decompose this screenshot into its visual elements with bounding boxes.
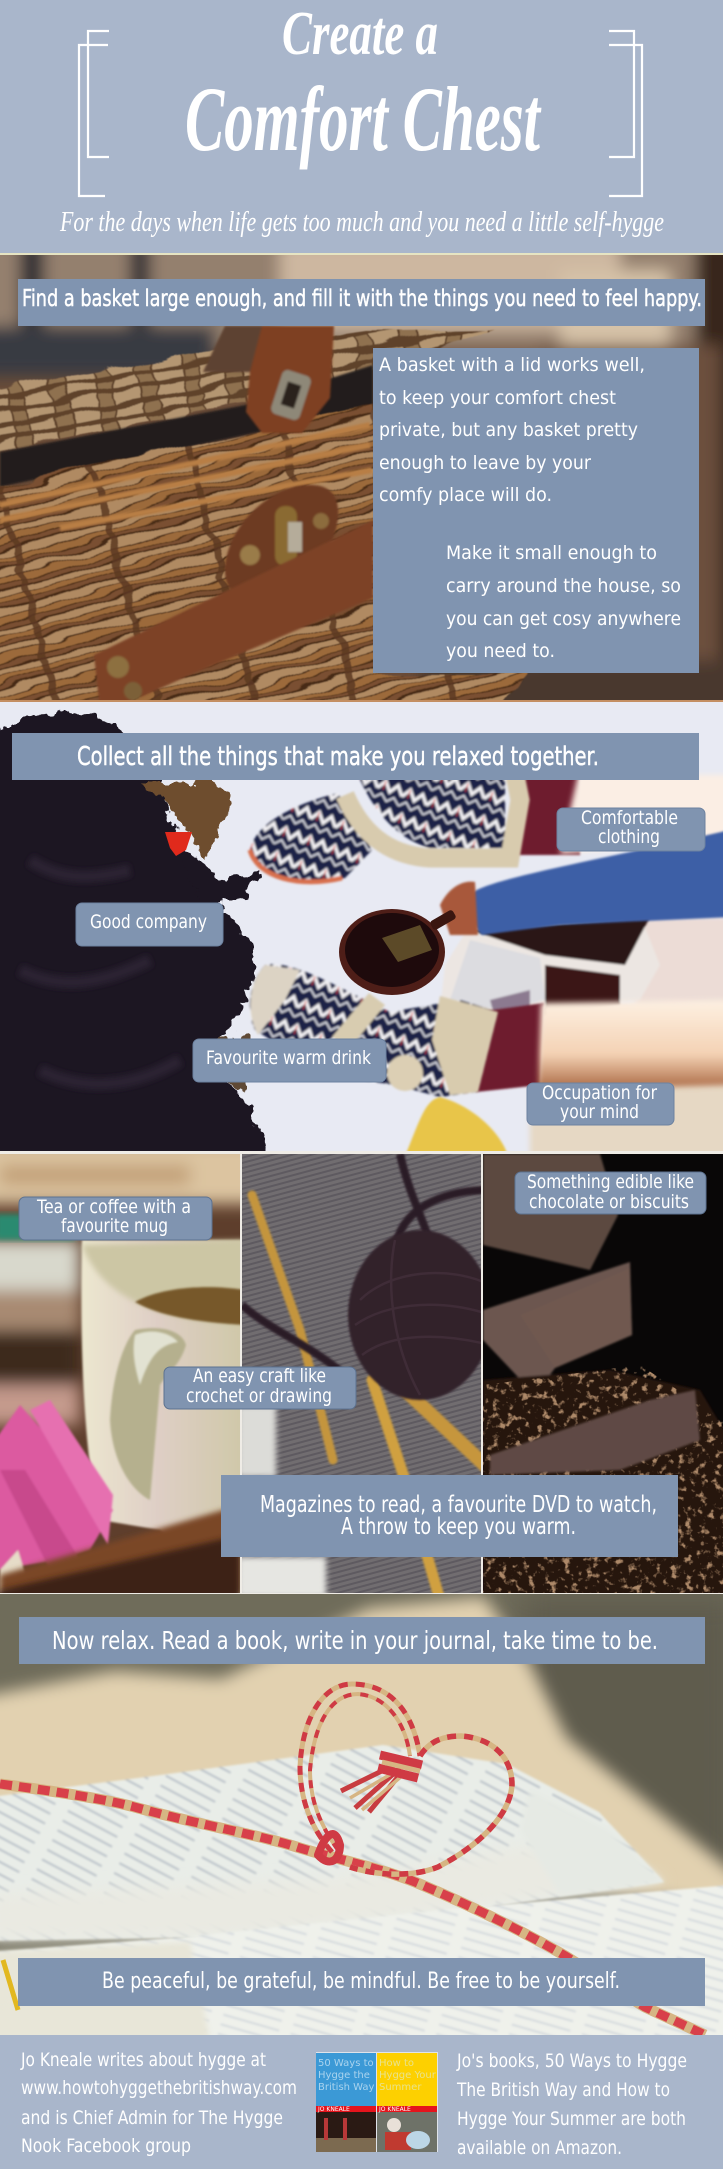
chocolate slab bbox=[490, 1390, 700, 1475]
dog bbox=[0, 713, 268, 1160]
text panel: basket advice: A basket with a lid works well, bbox=[379, 354, 645, 376]
heading bar: be peaceful bbox=[18, 1958, 705, 2006]
footer text: books: available on Amazon. bbox=[457, 2137, 622, 2159]
basket body wicker bbox=[0, 406, 530, 710]
text panel: basket advice: private, but any basket pretty bbox=[379, 419, 638, 441]
label: favourite warm drink bbox=[193, 1039, 386, 1082]
upper legwarmer bbox=[514, 775, 580, 855]
text panel: basket advice: you can get cosy anywhere bbox=[446, 608, 681, 630]
header background bbox=[0, 0, 723, 253]
chocolate crumbs bbox=[483, 1365, 723, 1593]
label: tea or coffee: favourite mug bbox=[61, 1215, 168, 1237]
blurred background behind basket bbox=[0, 240, 723, 720]
label: comfortable clothing: Comfortable bbox=[581, 807, 678, 829]
text panel: magazines: A throw to keep you warm. bbox=[341, 1514, 576, 1540]
label: good company: Good company bbox=[90, 911, 207, 933]
text panel: basket advice: Make it small enough to bbox=[446, 542, 657, 564]
text panel: magazines bbox=[221, 1475, 678, 1557]
lower slipper bbox=[250, 964, 498, 1097]
heart left lobe bbox=[300, 1684, 420, 1852]
upper slipper bbox=[250, 775, 520, 882]
lower page bbox=[0, 1885, 723, 2040]
cream bedding right side bbox=[528, 1083, 723, 1151]
label: something edible bbox=[515, 1171, 706, 1214]
cover: How to Hygge Your Summer: How to bbox=[379, 2058, 414, 2069]
cover: How to Hygge Your Summer: Summer bbox=[379, 2082, 422, 2093]
long ribbon bbox=[0, 1784, 705, 2035]
cover: 50 Ways to Hygge: 50 Ways to bbox=[318, 2058, 374, 2069]
heading bar: find a basket bbox=[18, 279, 705, 326]
label: tea or coffee: Tea or coffee with a bbox=[36, 1196, 191, 1218]
text panel: basket advice: you need to. bbox=[446, 640, 555, 662]
lower knot bbox=[318, 1834, 340, 1862]
green tea box bbox=[0, 1214, 75, 1240]
left bracket decoration bbox=[79, 31, 109, 196]
fur highlights bbox=[20, 860, 180, 1084]
blue sleeve bbox=[469, 830, 723, 935]
tea in mug bbox=[135, 1287, 245, 1325]
mug bbox=[81, 1240, 245, 1600]
label: easy craft bbox=[164, 1365, 356, 1409]
leather strap with rivets bbox=[94, 520, 373, 710]
crochet hooks bbox=[252, 1195, 490, 1600]
panel: tea photo bbox=[0, 1154, 240, 1593]
dark gap under lid bbox=[0, 365, 373, 487]
top leather clasp bbox=[203, 326, 334, 433]
label: occupation for your mind: Occupation for bbox=[542, 1082, 657, 1104]
heading bar: now relax bbox=[19, 1617, 705, 1664]
upper skin bbox=[560, 775, 723, 854]
divider strip between photos bbox=[0, 700, 723, 702]
hand bbox=[440, 882, 478, 935]
label: easy craft: crochet or drawing bbox=[186, 1385, 332, 1407]
panel: basket photo bbox=[0, 240, 723, 720]
footer text: author: Jo Kneale writes about hygge at bbox=[20, 2049, 266, 2071]
book covers bbox=[316, 2052, 438, 2152]
heart right lobe bbox=[350, 1736, 512, 1874]
panel: yarn photo bbox=[238, 1154, 492, 1600]
yarn ball bbox=[348, 1230, 492, 1400]
mug of tea bbox=[339, 909, 457, 995]
cover: How to Hygge Your Summer bbox=[377, 2053, 437, 2152]
yellow cushion bbox=[405, 1097, 508, 1156]
wooden tray bbox=[0, 1505, 240, 1593]
heading bar: collect bbox=[12, 733, 699, 780]
cover: 50 Ways to Hygge: British Way bbox=[318, 2082, 375, 2093]
label: something edible: chocolate or biscuits bbox=[529, 1191, 689, 1213]
ribbon and heart bbox=[0, 1684, 705, 2035]
footer panel bbox=[0, 2035, 723, 2169]
lower skin bbox=[538, 1000, 723, 1090]
cover: 50 Ways to Hygge: Hygge the bbox=[318, 2070, 370, 2081]
panel: cosy socks photo bbox=[0, 702, 723, 1160]
cover: 50 Ways to Hygge: JO KNEALE bbox=[317, 2106, 350, 2113]
upper page bbox=[0, 1745, 664, 1941]
mug inner shade bbox=[80, 1236, 240, 1310]
pink tea bags bbox=[0, 1400, 113, 1593]
title line: Create a: Create a bbox=[282, 0, 438, 68]
lower leather tab with buckle bbox=[225, 485, 338, 600]
footer text: books bbox=[456, 2050, 687, 2159]
label: favourite warm drink: Favourite warm drink bbox=[206, 1047, 371, 1069]
panel: chocolate photo bbox=[483, 1154, 723, 1600]
cover: How to Hygge Your Summer: Hygge Your bbox=[379, 2070, 437, 2081]
magazine bbox=[442, 919, 659, 1011]
label: good company bbox=[76, 903, 223, 946]
label: comfortable clothing: clothing bbox=[598, 826, 660, 848]
text panel: basket advice bbox=[373, 348, 699, 673]
label: tea or coffee bbox=[19, 1196, 212, 1240]
cover: How to Hygge Your Summer: JO KNEALE bbox=[378, 2106, 411, 2113]
yarn strands bbox=[242, 1154, 490, 1375]
warm light strands on upper body bbox=[0, 425, 372, 528]
top knot tassel bbox=[341, 1764, 402, 1812]
label: easy craft: An easy craft like bbox=[193, 1365, 326, 1387]
footer text: author: Nook Facebook group bbox=[21, 2135, 191, 2157]
text panel: basket advice: carry around the house, so bbox=[446, 575, 681, 597]
label: occupation for your mind bbox=[527, 1082, 674, 1125]
footer text: author: www.howtohyggethebritishway.com bbox=[21, 2077, 297, 2099]
basket lid bbox=[0, 328, 493, 452]
text panel: basket advice: to keep your comfort chest bbox=[379, 387, 616, 409]
cover: 50 Ways to Hygge bbox=[316, 2053, 376, 2152]
yellow book edge bbox=[3, 1960, 18, 2010]
right bracket decoration bbox=[609, 31, 642, 196]
footer text: author: and is Chief Admin for The Hygge bbox=[21, 2107, 283, 2129]
red tag bbox=[165, 832, 192, 856]
mug handle bbox=[110, 1328, 186, 1500]
title block bbox=[185, 0, 542, 170]
text panel: basket advice: enough to leave by your bbox=[379, 452, 591, 474]
text panel: basket advice: comfy place will do. bbox=[379, 484, 552, 506]
cushion cloth bbox=[0, 1597, 723, 1910]
yarn ball texture bbox=[355, 1240, 490, 1395]
lower legwarmer bbox=[476, 1003, 544, 1092]
footer text: books: The British Way and How to bbox=[456, 2079, 670, 2101]
label: occupation for your mind: your mind bbox=[560, 1101, 639, 1123]
label: comfortable clothing bbox=[557, 807, 705, 851]
white crochet bbox=[238, 1405, 326, 1597]
divider strip behind gallery bbox=[0, 1151, 723, 1596]
panel: book and heart photo bbox=[0, 1594, 723, 2040]
footer text: author bbox=[20, 2049, 297, 2157]
